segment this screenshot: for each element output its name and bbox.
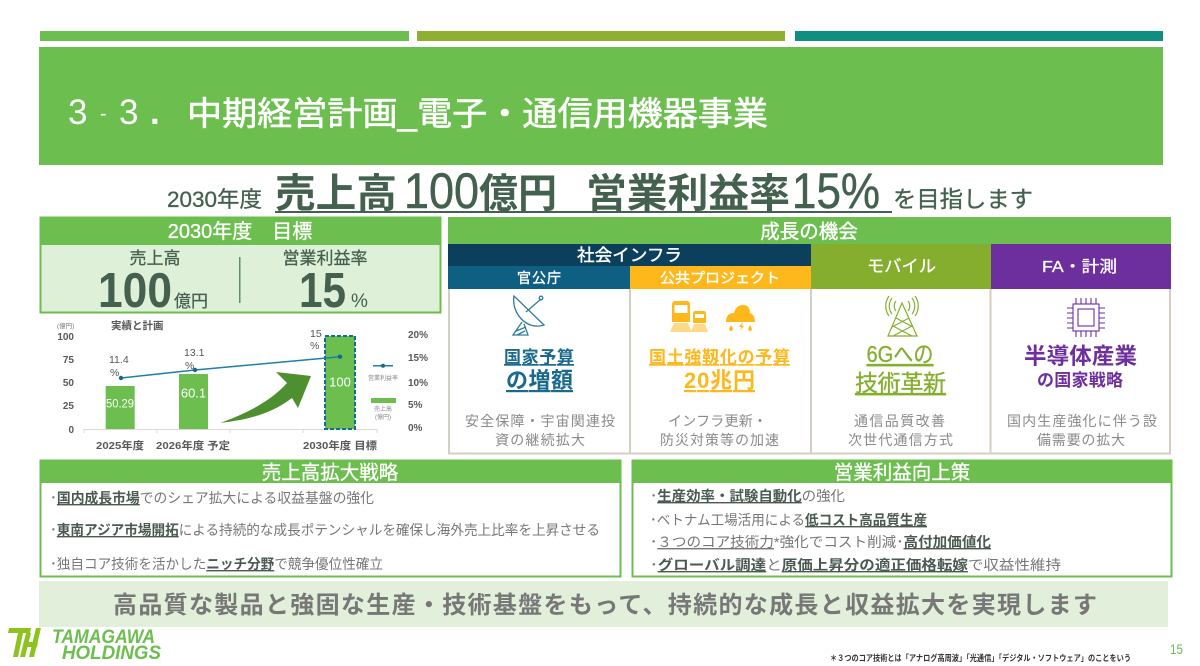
profit bullets: ･３つのコア技術力 *強化でコスト削減･ 高付加価値化: [650, 534, 991, 550]
panel: 2030 target: 2030年度 目標: [168, 220, 312, 243]
bar and line chart: actual and plan: 5%: [408, 400, 423, 411]
panel: operating profit improvement: [632, 460, 1172, 576]
category labels: 2025年度: [96, 439, 145, 452]
opportunity descriptions: 資の継続拡大: [495, 432, 585, 448]
bar and line chart: actual and plan: (億円): [57, 321, 74, 330]
opportunity descriptions: 次世代通信方式: [848, 432, 953, 448]
bar and line chart: actual and plan: 実績と計画: [111, 319, 164, 332]
conclusion banner: 高品質な製品と強固な生産・技術基盤をもって、持続的な成長と収益拡大を実現します: [113, 592, 1097, 619]
margin target: %: [351, 291, 368, 312]
category labels: 2026年度 予定: [156, 439, 231, 452]
bar and line chart: actual and plan: 10%: [408, 378, 428, 389]
headline target: 億円: [479, 172, 557, 216]
title band: .: [150, 93, 160, 132]
icon: satellite dish: [513, 296, 544, 335]
bar and line chart: actual and plan: 15: [310, 328, 322, 340]
bar and line chart: actual and plan: 11.4: [109, 354, 129, 366]
column headers: モバイル: [867, 257, 936, 276]
panel: sales expansion strategy: 売上高拡大戦略: [262, 462, 399, 484]
opportunity: public projects: 20兆円: [684, 368, 755, 393]
opportunity descriptions: 国内生産強化に伴う設: [1007, 413, 1157, 429]
bar and line chart: actual and plan: 13.1: [184, 347, 205, 359]
category labels: [96, 439, 378, 452]
legend: [368, 364, 398, 421]
opportunity: government: 国家予算: [504, 347, 574, 367]
opportunity: FA and measurement: の国家戦略: [1037, 370, 1123, 390]
panel: growth opportunities: 成長の機会: [760, 221, 858, 243]
bar and line chart: actual and plan: 50: [63, 378, 74, 389]
opportunity: government: の増額: [506, 368, 573, 393]
headline target: 売上高: [275, 172, 397, 216]
profit margin line: [121, 357, 340, 378]
title band: 中期経営計画_電子・通信用機器事業: [187, 95, 768, 132]
strategy bullets: ･東南アジア市場開拓による持続的な成長ポテンシャルを確保し海外売上比率を上昇させる: [50, 522, 600, 538]
profit bullets: ･生産効率・試験自動化 の強化: [650, 488, 845, 504]
logo: Tamagawa Holdings: TAMAGAWA: [52, 627, 155, 648]
headline target: 100: [404, 163, 479, 219]
opportunity: mobile: [855, 341, 946, 396]
sales target: 億円: [174, 292, 208, 311]
legend: 売上高: [374, 405, 392, 413]
legend: (億円): [375, 413, 391, 421]
icon: trains and storm cloud: [670, 301, 755, 332]
column headers: 公共プロジェクト: [660, 270, 780, 286]
bar and line chart: actual and plan: 50.29: [106, 396, 134, 410]
opportunity descriptions: 通信品質改善: [854, 413, 945, 429]
profit bullets: [650, 488, 1061, 573]
icon: radio tower: [886, 296, 918, 336]
headline target: 15%: [792, 163, 880, 219]
margin target: 15: [299, 264, 346, 318]
profit bullets: ･グローバル調達 と原価上昇分の適正価格転嫁 で収益性維持: [650, 557, 1061, 573]
headline target: [167, 163, 1033, 219]
opportunity: public projects: [649, 347, 790, 393]
opportunity: FA and measurement: [1024, 344, 1137, 390]
title band: -: [100, 103, 107, 125]
opportunity: FA and measurement: 半導体産業: [1024, 344, 1137, 369]
strategy bullets: ･国内成長市場でのシェア拡大による収益基盤の強化: [50, 490, 374, 506]
strategy bullets: ･独自コア技術を活かしたニッチ分野で競争優位性確立: [50, 556, 383, 572]
icon: microchip: [1067, 298, 1105, 337]
bar and line chart: actual and plan: 0: [68, 425, 74, 436]
margin target: 営業利益率: [282, 249, 368, 268]
opportunity descriptions: 備需要の拡大: [1037, 432, 1125, 448]
opportunity descriptions: 安全保障・宇宙関連投: [465, 413, 615, 429]
column headers: FA・計測: [1042, 258, 1117, 276]
bar and line chart: actual and plan: 25: [63, 401, 74, 412]
top accent bars: [40, 31, 1163, 41]
panel: growth opportunities: [448, 217, 1171, 454]
page number: 15: [1170, 641, 1183, 657]
logo: Tamagawa Holdings: [8, 627, 161, 664]
bar and line chart: actual and plan: 60.1: [181, 386, 206, 400]
strategy bullets: [50, 490, 600, 572]
opportunity descriptions: [465, 413, 1157, 448]
panel: sales expansion strategy: [40, 460, 621, 576]
headline target: 営業利益率: [586, 172, 790, 216]
growth arrow: [220, 372, 311, 423]
opportunity: mobile: 技術革新: [855, 370, 946, 396]
margin target: [282, 249, 368, 318]
bar and line chart: actual and plan: 100: [57, 332, 74, 343]
bars: [106, 386, 135, 429]
title band: [39, 47, 1163, 165]
opportunity: public projects: 国土強靱化の予算: [649, 347, 790, 367]
panel: operating profit improvement: 営業利益向上策: [834, 462, 970, 484]
panel: 2030 target: [40, 217, 441, 318]
opportunity: mobile: 6Gへの: [866, 341, 934, 367]
title band: 3: [119, 93, 138, 132]
bar and line chart: actual and plan: %: [185, 360, 194, 372]
title band: 3: [68, 93, 87, 132]
legend: 営業利益率: [368, 374, 398, 382]
headline target: 2030年度: [167, 187, 262, 212]
bar and line chart: actual and plan: 100: [329, 374, 351, 390]
bar and line chart: actual and plan: [57, 319, 428, 452]
headline target: を目指します: [893, 186, 1033, 212]
sales target: [98, 249, 208, 318]
bar and line chart: actual and plan: %: [310, 340, 319, 352]
conclusion banner: [39, 581, 1168, 627]
column headers: 社会インフラ: [577, 246, 682, 265]
category labels: 2030年度 目標: [303, 439, 378, 452]
bar and line chart: actual and plan: %: [110, 367, 119, 379]
opportunity descriptions: 防災対策等の加速: [660, 432, 779, 448]
sales target: 100: [98, 264, 172, 318]
sales target: 売上高: [130, 249, 180, 268]
opportunity descriptions: インフラ更新・: [668, 413, 767, 429]
bar and line chart: actual and plan: 0%: [408, 423, 423, 434]
bar and line chart: actual and plan: 75: [63, 355, 74, 366]
opportunity: government: [504, 347, 574, 393]
bar and line chart: actual and plan: 15%: [408, 353, 428, 364]
bar and line chart: actual and plan: 20%: [408, 330, 428, 341]
footnote: ＊３つのコア技術とは「アナログ高周波」「光通信」「デジタル・ソフトウェア」のことをいう: [830, 653, 1131, 663]
column headers: [448, 244, 1171, 289]
profit bullets: ･ベトナム工場活用による低コスト高品質生産: [650, 512, 927, 528]
column headers: 官公庁: [517, 270, 561, 286]
logo: Tamagawa Holdings: HOLDINGS: [62, 643, 161, 664]
